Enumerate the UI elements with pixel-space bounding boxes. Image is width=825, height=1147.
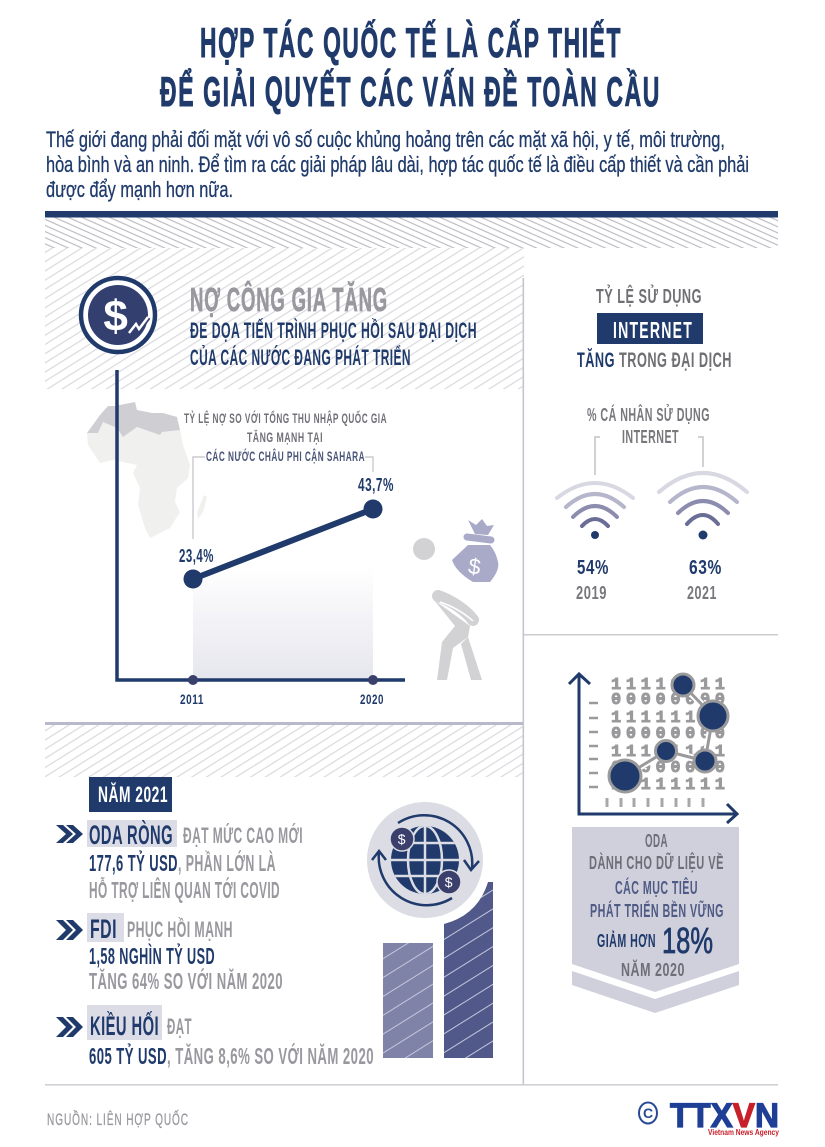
debt heading	[190, 280, 477, 370]
item: net ODA	[56, 819, 303, 903]
item: FDI: PHỤC HỒI MẠNH	[127, 917, 233, 942]
item: net ODA: HỖ TRỢ LIÊN QUAN TỚI COVID	[89, 875, 280, 903]
icon: data chart: 11111111	[611, 709, 725, 728]
item: remittances: , TĂNG 8,6% SO VỚI NĂM 2020	[167, 1042, 374, 1069]
icon: data chart: 11111111	[611, 676, 725, 695]
icon: wifi 2019	[557, 483, 633, 539]
logo: TTXVN: TTXVN	[670, 1097, 779, 1135]
callout: ODA decline: NĂM 2020	[621, 959, 685, 980]
internet heading: TỶ LỆ SỬ DỤNG	[596, 284, 702, 308]
year badge	[89, 777, 172, 812]
internet figures: 2019	[576, 583, 607, 603]
chart caption	[184, 409, 387, 539]
icon: data chart: 00000000	[611, 759, 725, 778]
icon: wifi 2021	[659, 473, 747, 540]
line chart: 23,4%	[179, 546, 214, 566]
item: remittances: KIỀU HỐI	[90, 1009, 159, 1041]
icon: data chart: 11111111	[611, 776, 725, 795]
chart caption: TỶ LỆ NỢ SO VỚI TỔNG THU NHẬP QUỐC GIA	[184, 409, 387, 426]
callout: ODA decline: CÁC MỤC TIÊU	[615, 877, 698, 898]
chart caption: TĂNG MẠNH TẠI	[247, 429, 323, 445]
debt heading: ĐE DỌA TIẾN TRÌNH PHỤC HỒI SAU ĐẠI DỊCH	[190, 318, 477, 343]
icon: person carrying debt	[413, 519, 498, 680]
internet figures: 54%	[577, 557, 609, 579]
line chart	[117, 370, 405, 707]
title	[160, 18, 661, 115]
logo: TTXVN: Vietnam News Agency	[708, 1128, 779, 1137]
item: FDI: FDI	[90, 914, 117, 944]
icon: data chart	[569, 674, 737, 823]
item: net ODA: , PHẦN LỚN LÀ	[178, 849, 276, 876]
icon: dollar falling	[81, 278, 155, 352]
item: FDI: 1,58 NGHÌN TỶ USD	[89, 941, 215, 969]
internet figures: 2021	[687, 583, 717, 603]
panel: internet use	[557, 284, 747, 603]
callout: ODA decline	[572, 827, 739, 1013]
icon: map of Africa	[87, 402, 207, 538]
debt heading: CỦA CÁC NƯỚC ĐANG PHÁT TRIỂN	[190, 345, 411, 370]
internet caption	[587, 404, 710, 475]
item: remittances	[56, 1005, 374, 1069]
icon: data chart: 00000000	[611, 691, 725, 710]
icon: dollar falling: $	[103, 292, 129, 341]
item: net ODA: ODA RÒNG	[89, 819, 173, 850]
intro text	[46, 127, 749, 202]
item: net ODA: 177,6 TỶ USD	[89, 848, 178, 876]
item: FDI	[56, 913, 283, 994]
panel: public debt	[81, 278, 498, 707]
item: remittances: 605 TỶ USD	[89, 1041, 167, 1069]
item: FDI: TĂNG 64% SO VỚI NĂM 2020	[89, 967, 283, 994]
item: net ODA: ĐẠT MỨC CAO MỚI	[183, 823, 303, 848]
callout: ODA decline: ODA	[645, 831, 668, 851]
panel: 2021 flows	[56, 777, 493, 1069]
internet figures	[576, 557, 722, 603]
icon: globe and money flow	[367, 802, 483, 918]
icon: globe and money flow: $	[398, 831, 406, 847]
internet heading: TRONG ĐẠI DỊCH	[619, 349, 732, 372]
debt heading: NỢ CÔNG GIA TĂNG	[190, 280, 388, 318]
source: NGUỒN: LIÊN HỢP QUỐC	[47, 1109, 189, 1129]
item: remittances: ĐẠT	[167, 1014, 192, 1039]
internet caption: INTERNET	[622, 427, 679, 447]
internet figures: 63%	[689, 557, 722, 579]
line chart: 2011	[180, 691, 204, 707]
chart caption: CÁC NƯỚC CHÂU PHI CẬN SAHARA	[206, 447, 365, 464]
logo: TTXVN: C	[643, 1105, 653, 1121]
internet heading: INTERNET	[613, 317, 693, 343]
icon: data chart: 11111111	[611, 743, 725, 762]
line chart: 2020	[360, 691, 384, 707]
icon: globe and money flow: $	[445, 874, 453, 890]
intro text: được đẩy mạnh hơn nữa.	[46, 177, 233, 202]
line chart: 43,7%	[358, 475, 394, 495]
year badge: NĂM 2021	[98, 782, 168, 807]
icon: data chart: 00000000	[611, 725, 725, 744]
callout: ODA decline: DÀNH CHO DỮ LIỆU VỀ	[589, 852, 724, 873]
callout: ODA decline: 18%	[662, 920, 713, 961]
internet caption: % CÁ NHÂN SỬ DỤNG	[587, 404, 710, 425]
icon: person carrying debt: $	[467, 553, 483, 580]
internet heading: TĂNG	[577, 349, 615, 372]
panel: ODA for data	[569, 674, 739, 1013]
bar graphic	[383, 882, 493, 1058]
callout: ODA decline: PHÁT TRIỂN BỀN VỮNG	[590, 900, 724, 921]
internet heading	[577, 284, 732, 372]
callout: ODA decline: GIẢM HƠN	[597, 930, 656, 951]
